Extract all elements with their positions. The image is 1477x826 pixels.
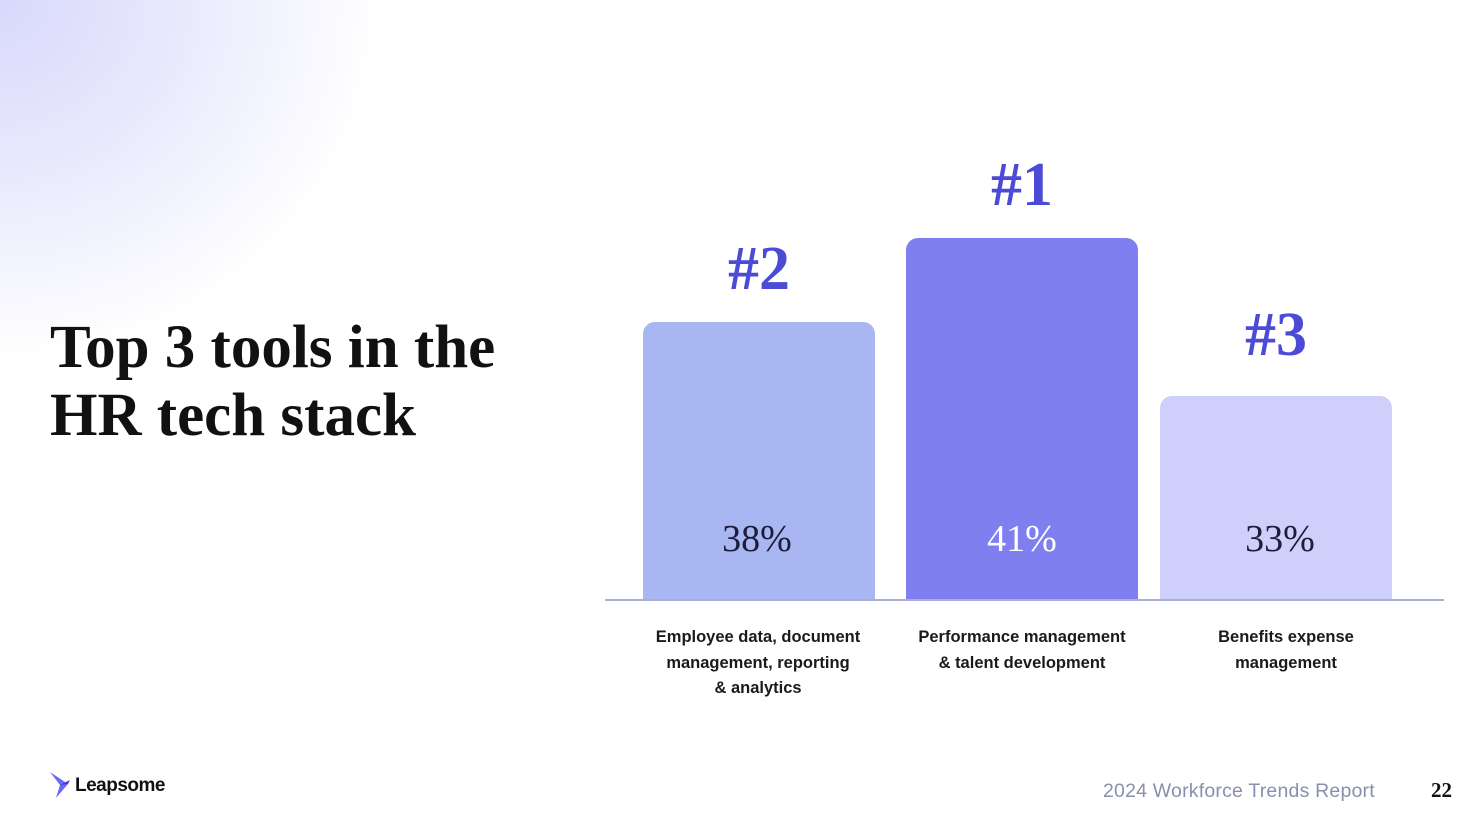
label 1: & analytics bbox=[714, 679, 802, 697]
label 2: & talent development bbox=[939, 654, 1105, 672]
label 3: management bbox=[1235, 654, 1337, 672]
label 1: Employee data, document bbox=[656, 628, 860, 646]
label 2 bbox=[918, 628, 1126, 672]
bar #2 bbox=[643, 322, 875, 600]
label 1: management, reporting bbox=[666, 654, 850, 672]
value 38%: 38% bbox=[722, 518, 792, 560]
chart bbox=[605, 151, 1444, 697]
bar #3 bbox=[1160, 396, 1392, 600]
label 2: Performance management bbox=[918, 628, 1126, 646]
bar #1 bbox=[906, 238, 1138, 600]
rank #2: #2 bbox=[728, 235, 790, 303]
label 3: Benefits expense bbox=[1218, 628, 1354, 646]
footer report name: 2024 Workforce Trends Report bbox=[1103, 780, 1375, 802]
logo: Leapsome bbox=[75, 775, 165, 796]
title bbox=[50, 314, 495, 449]
logo bbox=[50, 772, 165, 798]
title: Top 3 tools in the bbox=[50, 314, 495, 381]
rank #3: #3 bbox=[1245, 301, 1307, 369]
value 33%: 33% bbox=[1245, 518, 1315, 560]
label 1 bbox=[656, 628, 860, 697]
value 41%: 41% bbox=[987, 518, 1057, 560]
label 3 bbox=[1218, 628, 1354, 672]
rank #1: #1 bbox=[991, 151, 1053, 219]
title: HR tech stack bbox=[50, 382, 416, 449]
page number: 22 bbox=[1431, 778, 1452, 802]
